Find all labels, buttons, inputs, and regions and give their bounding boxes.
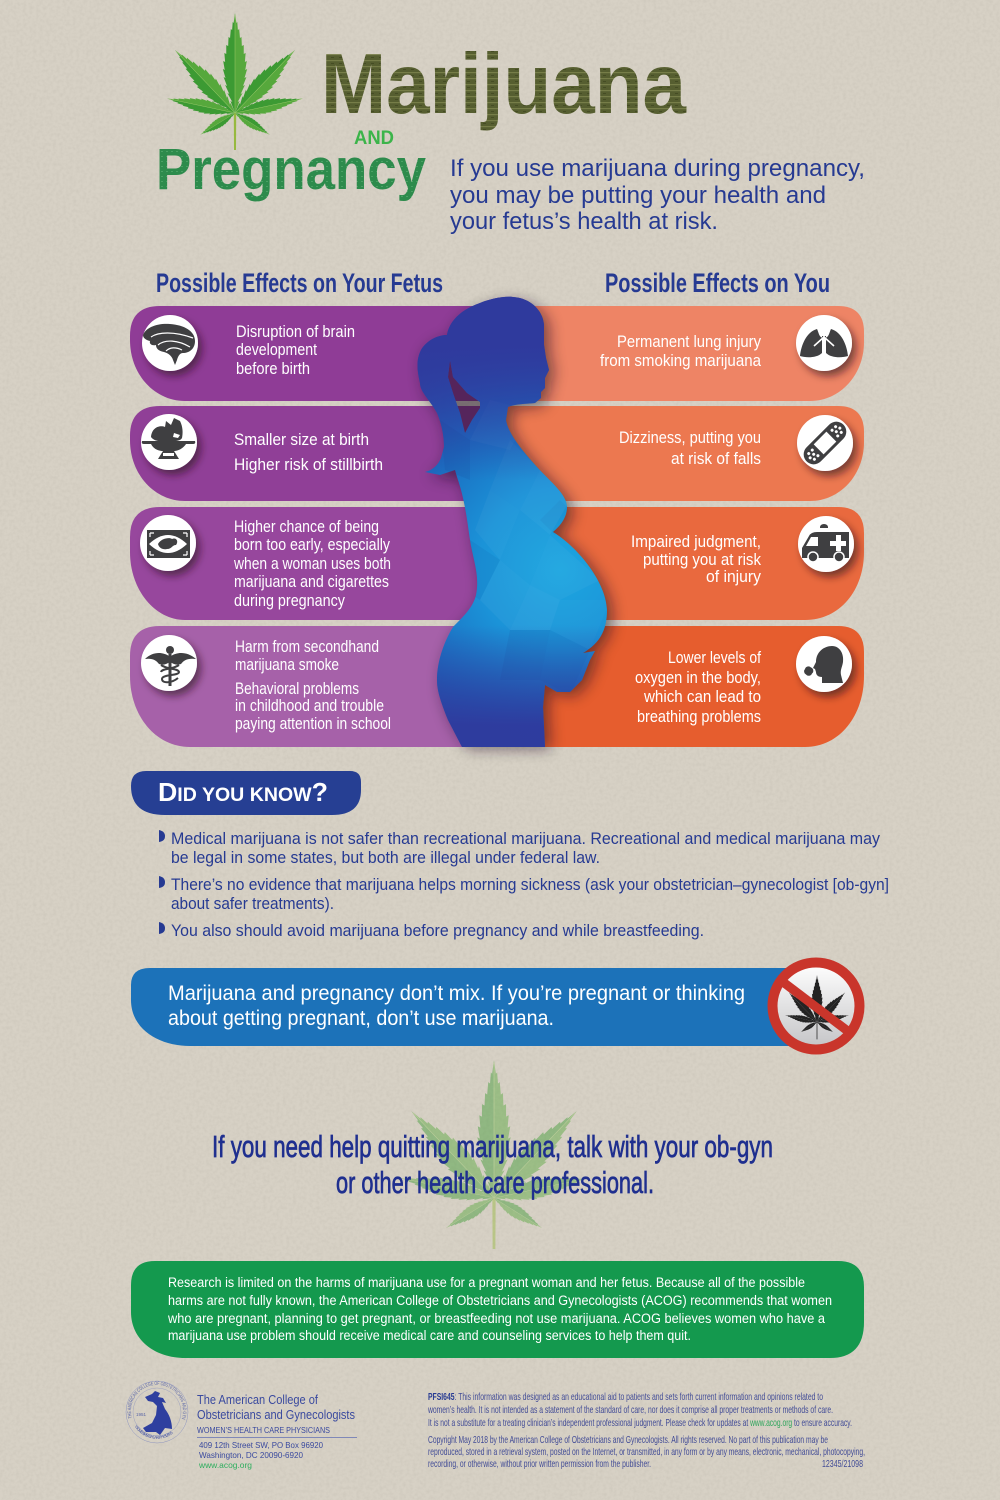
icon: caduceus bbox=[141, 635, 197, 691]
fine print: copyright: recording, or otherwise, without prior written permission from the publisher. bbox=[428, 1458, 651, 1470]
text: born too early: when a woman uses both bbox=[233, 554, 391, 573]
help text: or other health care professional. bbox=[336, 1165, 654, 1200]
text: impaired judgment: putting you at risk bbox=[643, 550, 761, 569]
logo text: ACOG: www.acog.org bbox=[198, 1460, 252, 1470]
bullet list: did you know bbox=[159, 829, 889, 940]
text: lower oxygen: oxygen in the body, bbox=[635, 668, 761, 687]
fine print: disclaimer: It is not a substitute for a treating clinician’s independent professional judgment. Please check for updates at www.acog.org to ensure accuracy. bbox=[428, 1417, 852, 1429]
panel row: secondhand smoke bbox=[130, 626, 500, 747]
text: brain development: Disruption of brain bbox=[236, 322, 355, 341]
text: dizziness bbox=[619, 428, 761, 468]
text: born too early: Higher chance of being bbox=[234, 517, 379, 536]
logo: ACOG seal: WOMEN'S HEALTH CARE PHYSICIANS bbox=[135, 1424, 173, 1439]
icon: faded cannabis leaf bbox=[398, 1060, 590, 1249]
panel: effects on fetus bbox=[130, 306, 500, 747]
logo text: ACOG: The American College of bbox=[197, 1393, 318, 1407]
text: lung injury bbox=[600, 332, 761, 370]
bullet: medical marijuana: Medical marijuana is not safer than recreational marijuana. Recreational and medical marijuana may bbox=[171, 829, 880, 848]
text: secondhand smoke: in childhood and trouble bbox=[235, 696, 384, 715]
text: impaired judgment bbox=[631, 532, 761, 586]
fine print: copyright bbox=[428, 1434, 865, 1470]
intro text: you may be putting your health and bbox=[450, 182, 826, 209]
text: impaired judgment: of injury bbox=[706, 567, 761, 586]
panel: effects on you bbox=[500, 306, 864, 747]
panel row: born too early bbox=[130, 507, 500, 620]
research text: harms are not fully known, the American College of Obstetricians and Gynecologists (ACOG) recommends that women bbox=[168, 1293, 832, 1308]
bullet: medical marijuana bbox=[171, 829, 880, 867]
text: secondhand smoke: Harm from secondhand bbox=[235, 637, 379, 656]
text: brain development bbox=[236, 322, 355, 378]
research text bbox=[167, 1275, 832, 1343]
help text: If you need help quitting marijuana, talk with your ob-gyn bbox=[212, 1129, 773, 1164]
panel row: dizziness bbox=[500, 406, 864, 501]
heading: did you know: DID YOU KNOW? bbox=[158, 777, 328, 807]
text: lower oxygen: which can lead to bbox=[643, 687, 761, 706]
banner: don't mix bbox=[131, 968, 800, 1046]
research text: marijuana use problem should receive medical care and counseling services to help them quit. bbox=[168, 1328, 691, 1343]
logo text: ACOG bbox=[197, 1393, 357, 1470]
title: AND: AND bbox=[354, 128, 394, 149]
panel row: lung injury bbox=[500, 306, 864, 401]
icon: lungs bbox=[796, 315, 852, 371]
research text: Research is limited on the harms of marijuana use for a pregnant woman and her fetus. Because all of the possible bbox=[168, 1275, 805, 1290]
text: born too early: marijuana and cigarettes bbox=[234, 572, 389, 591]
icon: no marijuana sign bbox=[772, 962, 860, 1050]
logo text: ACOG: 409 12th Street SW, PO Box 96920 bbox=[199, 1440, 323, 1450]
heading: effects on you: Possible Effects on You bbox=[605, 268, 830, 298]
title: Marijuana: Marijuana bbox=[321, 37, 687, 132]
panel row: lower oxygen bbox=[500, 626, 864, 747]
text: dizziness: Dizziness, putting you bbox=[619, 428, 761, 447]
text: birth size: Higher risk of stillbirth bbox=[234, 455, 383, 474]
text: lung injury: from smoking marijuana bbox=[600, 351, 761, 370]
text: lung injury: Permanent lung injury bbox=[617, 332, 761, 351]
bullet: medical marijuana: be legal in some states, but both are illegal under federal law. bbox=[171, 848, 600, 867]
panel row: impaired judgment bbox=[500, 507, 864, 620]
bullet: avoid: You also should avoid marijuana before pregnancy and while breastfeeding. bbox=[171, 921, 704, 940]
logo text: ACOG: Washington, DC 20090-6920 bbox=[199, 1450, 303, 1460]
logo: ACOG seal: THE AMERICAN COLLEGE OF OBSTETRICIANS AND GYNECOLOGISTS bbox=[128, 1382, 186, 1420]
bullet: morning sickness: There’s no evidence that marijuana helps morning sickness (ask your obstetrician–gynecologist [ob-gyn] bbox=[171, 875, 889, 894]
bullet: morning sickness bbox=[171, 875, 889, 913]
text: lower oxygen: breathing problems bbox=[637, 707, 761, 726]
text: brain development: development bbox=[236, 340, 317, 359]
title: Pregnancy: Pregnancy bbox=[156, 137, 426, 202]
bullet marker bbox=[159, 830, 165, 842]
icon: cannabis leaf bbox=[166, 13, 304, 150]
icon: bandage bbox=[797, 415, 853, 471]
text: born too early: born too early, especially bbox=[234, 535, 390, 554]
banner text bbox=[168, 981, 745, 1030]
intro text bbox=[450, 155, 865, 235]
bullet: morning sickness: about safer treatments). bbox=[171, 894, 334, 913]
logo: ACOG seal: 1951 bbox=[136, 1412, 147, 1417]
text: secondhand smoke: paying attention in school bbox=[235, 714, 391, 733]
panel row: birth size bbox=[130, 406, 500, 501]
text: birth size bbox=[234, 430, 383, 474]
icon: ultrasound bbox=[140, 515, 196, 571]
icon: brain bbox=[142, 315, 198, 371]
text: lower oxygen: Lower levels of bbox=[668, 648, 761, 667]
intro text: If you use marijuana during pregnancy, bbox=[450, 155, 865, 182]
heading: effects on fetus: Possible Effects on Your Fetus bbox=[156, 268, 443, 298]
text: born too early bbox=[233, 517, 391, 610]
text: dizziness: at risk of falls bbox=[671, 449, 761, 468]
panel row: brain development bbox=[130, 306, 500, 401]
text: secondhand smoke: marijuana smoke bbox=[235, 655, 339, 674]
banner text: Marijuana and pregnancy don’t mix. If you’re pregnant or thinking bbox=[168, 981, 745, 1005]
text: lower oxygen bbox=[635, 648, 761, 726]
text: secondhand smoke: Behavioral problems bbox=[235, 679, 359, 698]
icon: baby on scale bbox=[141, 414, 197, 470]
bullet marker bbox=[159, 922, 165, 934]
fine print: disclaimer bbox=[427, 1391, 852, 1429]
panel: research note bbox=[131, 1261, 864, 1358]
fine print: copyright: 12345/21098 bbox=[822, 1458, 863, 1470]
help text bbox=[212, 1129, 773, 1200]
research text: who are pregnant, planning to get pregnant, or breastfeeding not use marijuana. ACOG believes women who have a bbox=[167, 1311, 825, 1326]
button: did you know bbox=[131, 771, 361, 815]
intro text: your fetus’s health at risk. bbox=[450, 208, 718, 235]
logo text: ACOG: WOMEN’S HEALTH CARE PHYSICIANS bbox=[197, 1426, 330, 1435]
text: birth size: Smaller size at birth bbox=[234, 430, 369, 449]
icon: head breathing bbox=[796, 636, 852, 692]
text: secondhand smoke bbox=[235, 637, 391, 733]
text: born too early: during pregnancy bbox=[234, 591, 345, 610]
icon: ambulance bbox=[798, 516, 854, 572]
text: brain development: before birth bbox=[236, 359, 310, 378]
figure: pregnant woman silhouette bbox=[410, 290, 615, 750]
banner text: about getting pregnant, don’t use marijuana. bbox=[168, 1006, 554, 1030]
figure shadow bbox=[422, 301, 613, 749]
logo text: ACOG: Obstetricians and Gynecologists bbox=[197, 1408, 355, 1422]
logo: ACOG seal bbox=[126, 1380, 188, 1444]
bullet marker bbox=[159, 876, 165, 888]
text: impaired judgment: Impaired judgment, bbox=[631, 532, 761, 551]
